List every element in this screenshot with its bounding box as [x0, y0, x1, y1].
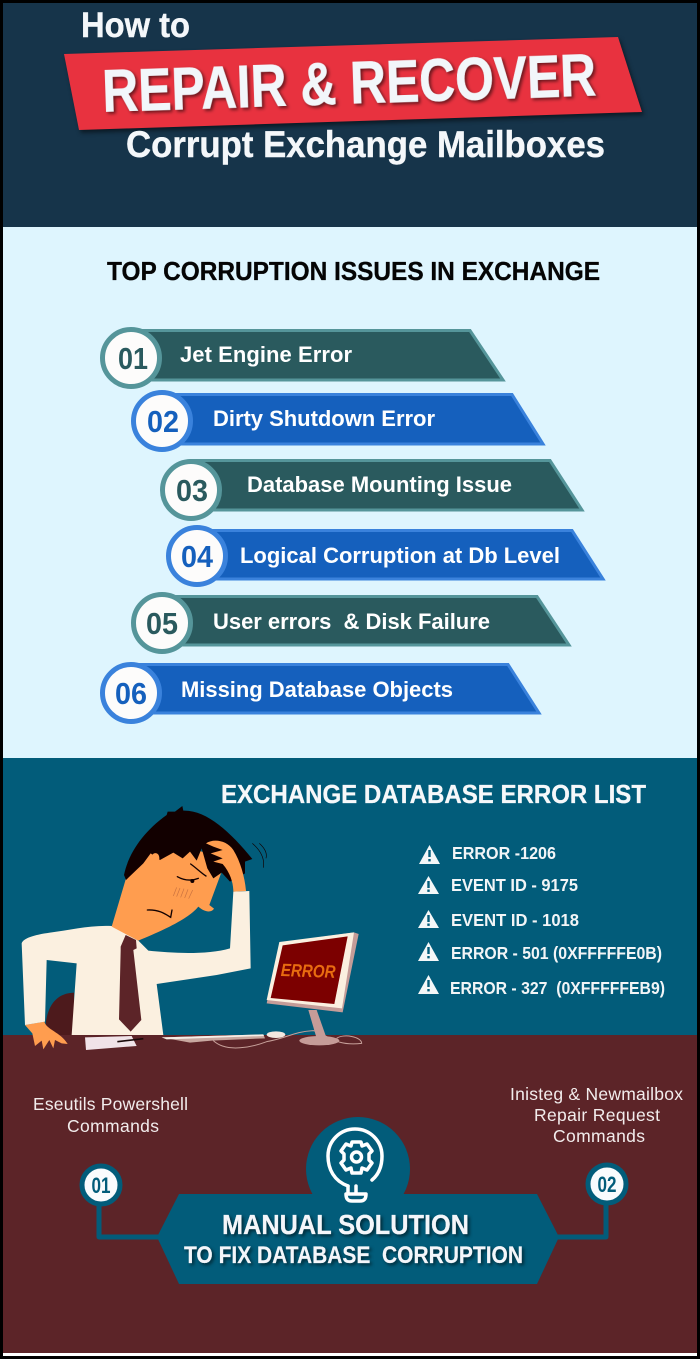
solution title: MANUAL SOLUTION — [222, 1209, 469, 1240]
worry marks — [252, 843, 266, 868]
cables — [213, 1031, 362, 1048]
heading: top corruption issues: TOP CORRUPTION ISSUES IN EXCHANGE — [107, 256, 600, 286]
title: corrupt exchange mailboxes: Corrupt Exchange Mailboxes — [126, 124, 605, 165]
icon: bulb with gear — [328, 1129, 382, 1201]
issue 02 — [134, 392, 543, 450]
issue 06 — [102, 664, 539, 722]
step badge 01: 01 — [92, 1173, 110, 1198]
issue 01: 01 — [118, 341, 148, 376]
panel: manual solution — [3, 1035, 697, 1353]
right command label: Commands — [553, 1126, 645, 1146]
hair — [124, 806, 252, 882]
icon circle — [306, 1117, 410, 1221]
connector lines — [99, 1200, 606, 1237]
left hand — [25, 1022, 68, 1049]
shirt — [22, 891, 251, 1035]
error list — [418, 843, 665, 998]
illustration: stressed man at computer — [22, 806, 362, 1050]
right command label: Repair Request — [534, 1105, 660, 1125]
papers — [85, 1036, 143, 1050]
tie — [119, 935, 141, 1032]
solution title — [184, 1209, 523, 1269]
heading: error list: EXCHANGE DATABASE ERROR LIST — [221, 779, 646, 809]
solution title: TO FIX DATABASE CORRUPTION — [184, 1242, 523, 1269]
keyboard — [162, 1034, 265, 1043]
face — [112, 840, 222, 941]
title: repair and recover: REPAIR & RECOVER — [101, 42, 597, 125]
solution hexagon — [157, 1194, 559, 1284]
error 5 — [418, 975, 665, 998]
issue 03: 03 — [176, 473, 208, 508]
issue 03 — [162, 460, 582, 518]
error 1 — [419, 843, 556, 864]
issue 02: 02 — [147, 404, 179, 439]
eye and brow — [147, 864, 206, 917]
monitor stand — [299, 1010, 339, 1045]
ear — [151, 853, 159, 861]
title: how to: How to — [81, 6, 190, 45]
issue 04: Logical Corruption at Db Level — [240, 543, 560, 568]
left command label: Commands — [67, 1116, 159, 1136]
issue 04: 04 — [181, 539, 214, 574]
panel: exchange database error list — [3, 758, 697, 1035]
error 5: ERROR - 327 (0XFFFFFEB9) — [450, 978, 665, 998]
issue 05: 05 — [146, 606, 178, 641]
panel: top corruption issues — [3, 227, 697, 758]
issue 06: Missing Database Objects — [181, 677, 453, 702]
chair — [45, 993, 74, 1035]
error 4: ERROR - 501 (0XFFFFFE0B) — [451, 943, 662, 963]
left command label — [33, 1094, 188, 1136]
issue 03: Database Mounting Issue — [247, 472, 512, 497]
blush lines — [173, 887, 193, 899]
title banner — [64, 37, 642, 130]
hand on head — [206, 841, 246, 892]
right command label: Inisteg & Newmailbox — [510, 1084, 683, 1104]
step badge 02 — [588, 1165, 626, 1203]
right command label — [510, 1084, 683, 1146]
issue 06: 06 — [115, 676, 147, 711]
monitor — [267, 932, 359, 1012]
issue 01 — [102, 330, 503, 386]
step badge 01 — [82, 1166, 120, 1204]
monitor: ERROR — [281, 960, 336, 982]
error 3: EVENT ID - 1018 — [451, 910, 579, 930]
issue 02: Dirty Shutdown Error — [213, 406, 435, 431]
error 1: ERROR -1206 — [452, 843, 556, 863]
issue 04 — [168, 528, 603, 584]
left command label: Eseutils Powershell — [33, 1094, 188, 1114]
error 2: EVENT ID - 9175 — [451, 875, 578, 895]
step badge 02: 02 — [598, 1172, 616, 1197]
panel: header — [3, 3, 697, 227]
issue 05 — [134, 594, 569, 652]
mouse — [267, 1031, 285, 1038]
issue 05: User errors & Disk Failure — [213, 609, 490, 634]
issue 01: Jet Engine Error — [180, 342, 352, 367]
